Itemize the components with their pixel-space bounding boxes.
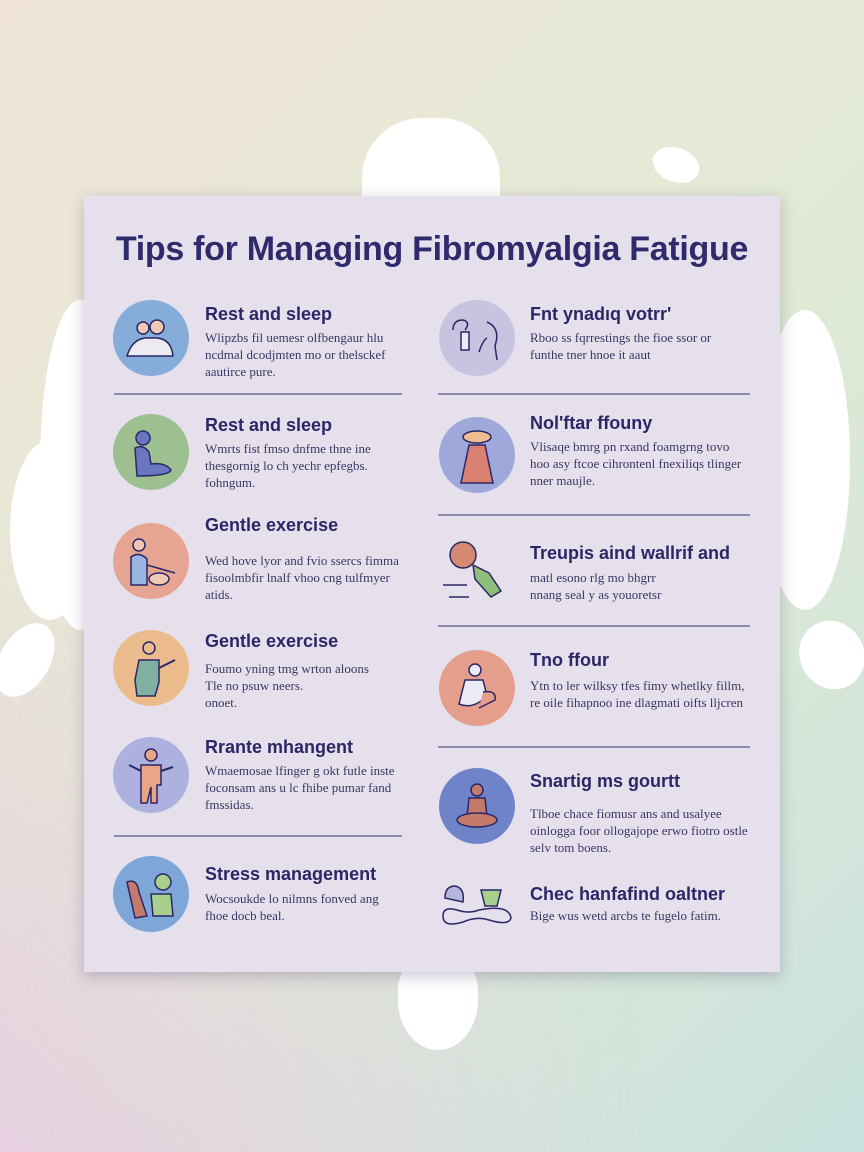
tip: right 2: Nol'ftar ffouny	[530, 413, 652, 433]
icon: person with tool	[113, 630, 189, 706]
tip: right 1: Fnt ynadıq votrr'	[530, 304, 671, 324]
tip: stress management: Wocsoukde lo nilmns fonved ang fhoe docb beal.	[205, 891, 379, 923]
tip: stress management: Stress management	[205, 864, 376, 884]
tip: rest and sleep 1: Rest and sleep	[205, 304, 332, 324]
tip: rest and sleep 2: Rest and sleep	[205, 415, 332, 435]
tip: right 6	[442, 884, 725, 925]
tip: rest and sleep 2: Wmrts fist fmso dnfme thne ine thesgornig lo ch yechr epfegbs. fohngum.	[205, 441, 371, 490]
icon: two cups	[442, 885, 512, 925]
icon: meditation	[439, 768, 515, 844]
tip: right 5	[439, 768, 748, 855]
tip: rrante mhangent: Rrante mhangent	[205, 737, 353, 757]
tip: gentle exercise 2: Foumo yning tmg wrton aloons	[205, 661, 369, 676]
icon: resting people	[113, 300, 189, 376]
icon: stretching	[113, 523, 189, 599]
tip: right 5: Snartig ms gourtt	[530, 771, 680, 791]
tip: right 1: funthe tner hnoe it aaut	[530, 347, 651, 362]
title: Tips for Managing Fibromyalgia Fatigue	[116, 230, 748, 268]
tip: gentle exercise 2	[113, 630, 369, 710]
icon: inhaler face	[439, 300, 515, 376]
tip: right 3	[443, 541, 730, 602]
tip: right 3: nnang seal y as youoretsr	[530, 587, 661, 602]
tip: right 5: Tlboe chace fiomusr ans and usalyee oinlogga foor ollogajope erwo fiotro ostle selv tom boens.	[530, 806, 748, 855]
tip: gentle exercise 1: Gentle exercise	[205, 515, 338, 535]
icon: stress figures	[113, 856, 189, 932]
tip: right 1: Rboo ss fqrrestings the fioe ssor or	[530, 330, 711, 345]
tip: right 2	[439, 413, 742, 493]
tip: stress management	[113, 856, 379, 932]
tip: rrante mhangent: Wmaemosae lfinger g okt futle inste foconsam ans u lc fhibe pumar fand fmssidas.	[205, 763, 395, 812]
tip: gentle exercise 1: Wed hove lyor and fvio ssercs fimma fisoolmbfir lnalf vhoo cng tulfmyer atids.	[205, 553, 399, 602]
tip: gentle exercise 2: Tle no psuw neers.	[205, 678, 303, 693]
tip: rrante mhangent	[113, 737, 395, 813]
tip: rest and sleep 1	[113, 300, 386, 379]
tip: right 2: Vlisaqe bmrg pn rxand foamgrng tovo hoo asy ftcoe cihrontenl fnexiliqs tlinger nner maujle.	[530, 439, 741, 488]
tip: right 4	[439, 650, 744, 726]
icon: woman	[439, 417, 515, 493]
tip: right 6: Chec hanfafind oaltner	[530, 884, 725, 904]
tip: gentle exercise 1	[113, 515, 399, 602]
tip: gentle exercise 2: onoet.	[205, 695, 237, 710]
tip: right 4: Tno ffour	[530, 650, 609, 670]
tip: right 6: Bige wus wetd arcbs te fugelo fatim.	[530, 908, 721, 923]
tip: rest and sleep 1: Wlipzbs fil uemesr olfbengaur hlu ncdmal dcodjmten mo or thelsckef aautirce pure.	[205, 330, 386, 379]
tip: rest and sleep 2	[113, 414, 371, 490]
icon: bald man with bottle	[443, 541, 502, 598]
tip: right 3: matl esono rlg mo bhgrr	[530, 570, 656, 585]
icon: standing person	[113, 737, 189, 813]
tip: right 4: Ytn to ler wilksy tfes fimy whetlky fillm, re oile fihapnoo ine dlagmati oifts lljcren	[530, 678, 744, 710]
tip: right 1	[439, 300, 712, 376]
main card	[84, 196, 780, 972]
tip: gentle exercise 2: Gentle exercise	[205, 631, 338, 651]
tip: right 3: Treupis aind wallrif and	[530, 543, 730, 563]
icon: kneeling person	[439, 650, 515, 726]
icon: sitting person	[113, 414, 189, 490]
